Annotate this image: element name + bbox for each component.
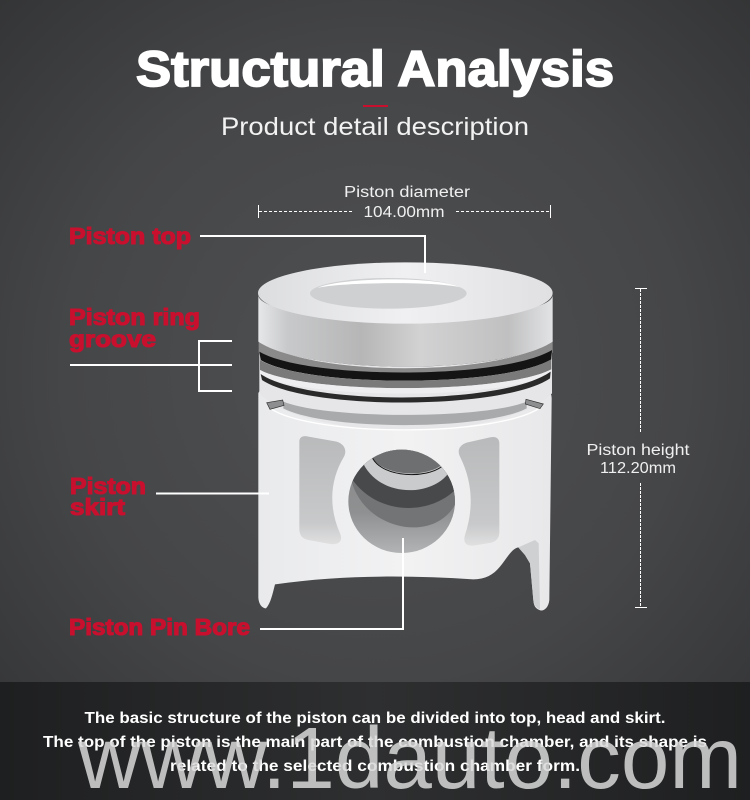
description text [43, 710, 707, 775]
label: piston pin bore [69, 538, 403, 640]
title accent line [363, 105, 388, 107]
label: piston ring groove: groove [69, 326, 156, 352]
pin bore [348, 450, 455, 553]
piston head side [258, 295, 553, 367]
subtitle: Product detail description [221, 113, 529, 141]
right window [459, 437, 499, 546]
label: piston skirt [70, 473, 269, 520]
label: piston skirt: skirt [70, 494, 125, 520]
label: piston skirt: Piston [70, 473, 146, 499]
piston crown [258, 262, 553, 324]
piston diameter dimension: 104.00mm [364, 204, 444, 221]
description text: related to the selected combustion chamber form. [170, 758, 580, 775]
left window [299, 436, 345, 544]
piston skirt [258, 390, 552, 611]
combustion bowl [310, 278, 467, 309]
label: piston pin bore: Piston Pin Bore [69, 614, 250, 640]
piston [258, 262, 553, 611]
label: piston top: Piston top [69, 223, 191, 249]
title: Structural Analysis [136, 41, 614, 97]
right leg inner face [518, 540, 540, 609]
label: piston top [69, 223, 425, 273]
description text: The basic structure of the piston can be divided into top, head and skirt. [84, 710, 666, 727]
ring lands [259, 340, 553, 430]
piston height dimension: 112.20mm [600, 460, 676, 477]
piston diameter dimension: Piston diameter [344, 184, 470, 201]
label: piston ring groove [69, 304, 232, 391]
piston height dimension: Piston height [586, 442, 690, 459]
ring gap notches [267, 399, 543, 409]
description text: The top of the piston is the main part of the combustion chamber, and its shape is [43, 734, 707, 751]
piston diameter dimension [258, 184, 550, 221]
piston height dimension [586, 288, 690, 608]
bottom text band [0, 682, 750, 800]
label: piston ring groove: Piston ring [69, 304, 200, 330]
